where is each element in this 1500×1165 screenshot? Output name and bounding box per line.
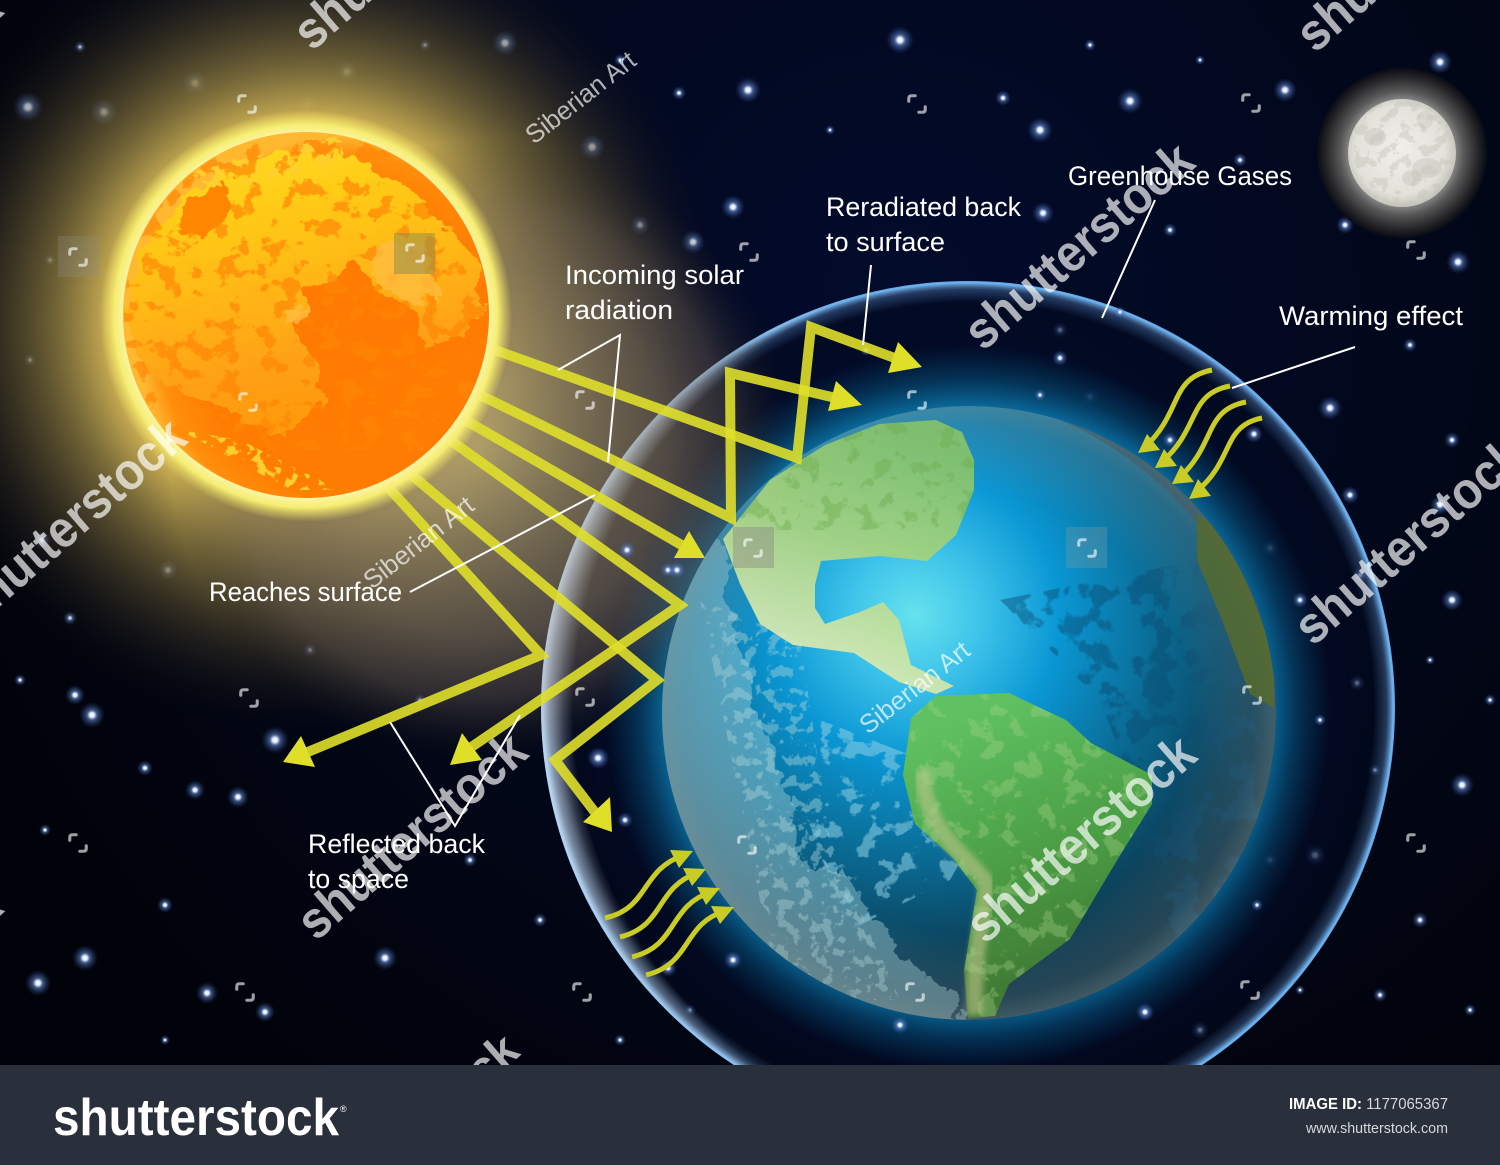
watermarks: shutterstock — [955, 724, 1207, 954]
continent: Africa — [1197, 514, 1274, 708]
leader lines — [390, 200, 1355, 826]
label: reflected back to space: Reflected back — [308, 829, 485, 859]
label: reflected back to space: to space — [308, 864, 409, 894]
watermarks: Siberian Art — [853, 634, 976, 740]
pale inner rim of atmosphere — [541, 298, 848, 1065]
wave arrow 2 — [1155, 386, 1230, 468]
warming effect arrows, upper right — [1138, 370, 1262, 499]
wave arrow 4 — [1189, 418, 1262, 499]
sunlit glow over the atmosphere — [170, 140, 790, 760]
leader: reradiated back — [863, 265, 871, 345]
ray reflected back into atmosphere — [408, 472, 657, 832]
earth — [640, 400, 1280, 1040]
South America mottling — [900, 690, 1160, 1020]
watermarks: shutterstock — [286, 721, 538, 951]
stars inside atmosphere — [587, 306, 1326, 1034]
footer registered mark: ® — [340, 1104, 347, 1114]
wave arrow 1 — [1138, 370, 1212, 453]
moon craters — [1354, 101, 1449, 200]
moon halo — [1316, 67, 1488, 239]
ray reaching surface — [465, 420, 705, 558]
dark ocean patches — [1000, 566, 1260, 946]
dark patch upper left — [182, 180, 230, 238]
wave arrow 3 — [1172, 402, 1246, 484]
rim shading — [662, 406, 1276, 1020]
sun — [100, 110, 512, 522]
leader: incoming solar radiation — [558, 335, 620, 462]
ray reflected from atmosphere near earth — [450, 440, 680, 765]
label: incoming solar radiation: Incoming solar — [565, 260, 744, 290]
label: reradiated back to surface: to surface — [826, 227, 945, 257]
footer logo: shutterstock — [53, 1089, 339, 1147]
atmosphere — [170, 140, 1395, 1135]
footer image id: IMAGE ID: 1177065367 — [1289, 1096, 1448, 1113]
wave arrow 6 — [620, 868, 706, 937]
label: warming effect: Warming effect — [1279, 301, 1464, 331]
rays and arrows — [283, 327, 922, 832]
wave arrow 8 — [646, 906, 734, 975]
watermarks: Siberian Art — [357, 489, 480, 595]
Andes band — [922, 770, 986, 1015]
moon — [1316, 67, 1488, 239]
watermark tiles — [58, 233, 1107, 568]
continent: South America — [903, 693, 1152, 1018]
wave arrow 7 — [632, 887, 720, 957]
ray reradiated once — [480, 373, 862, 518]
ray reradiated twice — [495, 327, 922, 458]
leader: warming effect — [1232, 347, 1355, 388]
leader: reaches surface — [410, 495, 595, 592]
sun outer glow — [0, 0, 722, 732]
label: reaches surface: Reaches surface — [209, 577, 402, 607]
leader: reflected back — [390, 715, 520, 826]
sun surface patches — [120, 135, 490, 490]
label: greenhouse gases: Greenhouse Gases — [1068, 161, 1292, 191]
sun body — [123, 132, 489, 498]
watermarks: ck — [455, 1022, 528, 1096]
moon disc — [1348, 99, 1456, 207]
label: incoming solar radiation: radiation — [565, 295, 673, 325]
footer bar — [0, 1065, 1500, 1165]
ray reflected to space — [283, 487, 541, 767]
watermark marks — [70, 95, 1424, 1000]
continent: North America — [723, 420, 974, 694]
orange holes in the land — [120, 140, 490, 450]
label: reradiated back to surface: Reradiated back — [826, 192, 1021, 222]
leader: greenhouse gases — [1102, 200, 1155, 318]
wave arrow 5 — [605, 850, 693, 918]
watermarks: Siberian Art — [519, 44, 642, 150]
North America mottling — [730, 420, 980, 530]
pale patch — [285, 245, 440, 328]
ocean — [662, 406, 1276, 1020]
footer url: www.shutterstock.com — [1305, 1120, 1448, 1137]
pale ocean-floor patches — [640, 400, 1280, 1040]
sun halo ring — [100, 110, 512, 522]
warming effect arrows, lower left — [605, 850, 734, 975]
watermarks: shutterstock — [953, 131, 1205, 361]
yellow specks along top and lower rim — [180, 135, 345, 490]
